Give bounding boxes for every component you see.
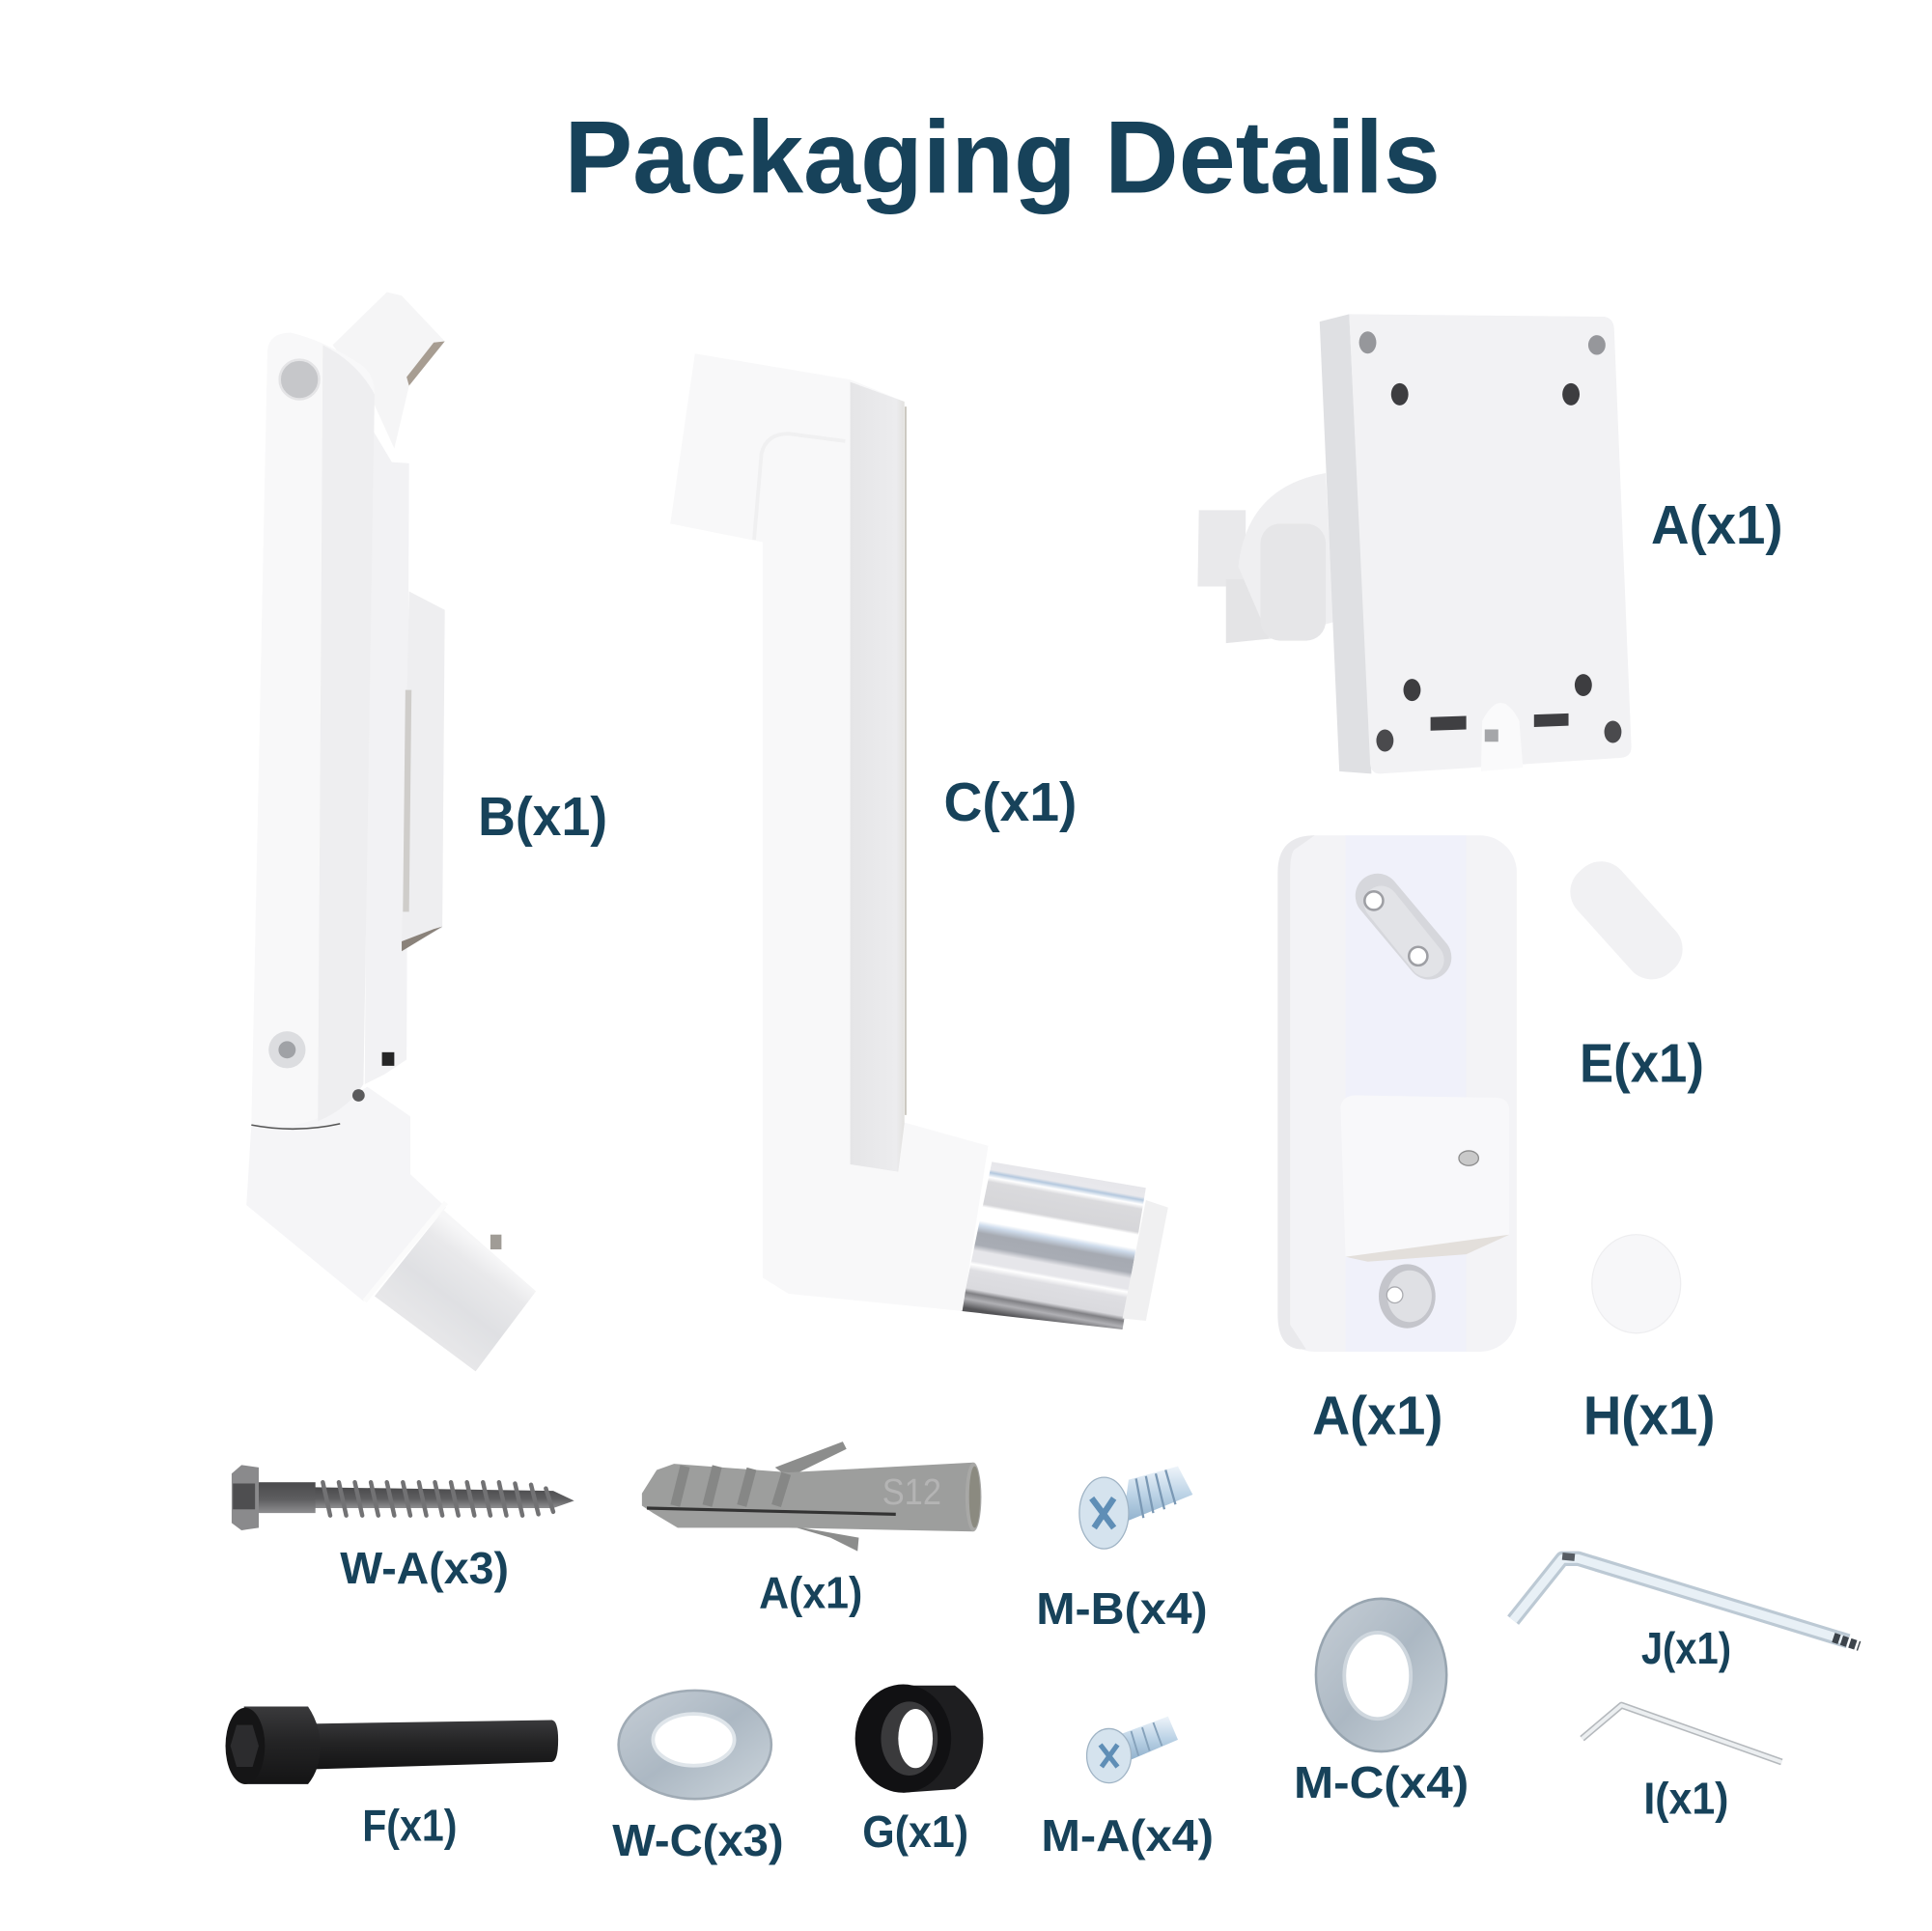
- mounting holes: [1359, 331, 1621, 751]
- thread: [1119, 1717, 1178, 1761]
- part M-B: machine screw: [1079, 1467, 1192, 1549]
- part H: round cap: [1592, 1235, 1681, 1333]
- main body of arm B: [251, 333, 375, 1126]
- cap inner fold: [754, 434, 845, 540]
- clamp screw: [1459, 1151, 1478, 1165]
- sleeve end: [1123, 1200, 1168, 1321]
- shaft: [311, 1721, 558, 1770]
- part C: L-shaped arm: [670, 353, 1168, 1329]
- thread teeth: [322, 1482, 553, 1516]
- back plate of arm B: [402, 592, 445, 951]
- label A, plate: A(x1): [1651, 494, 1783, 555]
- title: Packaging Details: [564, 99, 1441, 215]
- part W-A: lag bolt: [232, 1465, 574, 1530]
- seam under arm B: [251, 1124, 340, 1129]
- clamp block: [1340, 1096, 1509, 1262]
- label W-A: W-A(x3): [340, 1543, 509, 1593]
- plate base: [1277, 835, 1517, 1352]
- label M-A: M-A(x4): [1041, 1810, 1214, 1861]
- slots: [1431, 714, 1569, 731]
- label F: F(x1): [362, 1801, 457, 1851]
- arm body: [670, 353, 988, 1311]
- part E: slot cover: [1559, 851, 1694, 991]
- socket: [226, 1708, 265, 1784]
- head: [244, 1706, 321, 1784]
- left edge: [1277, 835, 1315, 1350]
- pin on arm B: [490, 1235, 501, 1249]
- part: wall anchor: [642, 1441, 981, 1552]
- anchor body: [642, 1463, 973, 1531]
- inner bar of arm B: [365, 425, 409, 1084]
- diagonal slot: [1364, 891, 1429, 966]
- part W-C: washer: [619, 1691, 771, 1799]
- thread lines: [1136, 1469, 1175, 1518]
- lower elbow of arm B: [246, 1087, 446, 1301]
- black clip of arm B: [382, 1052, 394, 1066]
- tube end of arm B: [375, 1210, 536, 1371]
- label J: J(x1): [1641, 1623, 1731, 1673]
- label E: E(x1): [1580, 1032, 1704, 1093]
- chrome sleeve: [961, 1161, 1146, 1329]
- lower hole: [1379, 1264, 1436, 1329]
- part A: VESA plate with bracket: [1197, 314, 1632, 773]
- hex head: [232, 1465, 259, 1530]
- center notch: [1481, 703, 1523, 771]
- arm edge line: [905, 406, 907, 1115]
- top rivet: [280, 360, 320, 399]
- label C: C(x1): [944, 771, 1077, 832]
- bracket tab: [1197, 510, 1246, 586]
- anchor slit: [647, 1508, 896, 1514]
- label A, anchor: A(x1): [759, 1567, 862, 1617]
- lower screw: [268, 1031, 305, 1068]
- plate side: [1320, 314, 1371, 773]
- part F: black bolt: [226, 1706, 558, 1784]
- label G: G(x1): [862, 1806, 968, 1857]
- anchor mouth: [966, 1463, 981, 1531]
- thread: [1123, 1467, 1192, 1523]
- center band: [1346, 835, 1467, 1352]
- head: [1079, 1477, 1129, 1549]
- part B: folding arm: [246, 292, 536, 1371]
- threaded core: [314, 1487, 574, 1508]
- head: [1087, 1728, 1132, 1783]
- label M-B: M-B(x4): [1036, 1583, 1208, 1634]
- bracket cap: [1260, 523, 1326, 641]
- part M-C: washer: [1316, 1599, 1446, 1751]
- label M-C: M-C(x4): [1294, 1757, 1469, 1807]
- part I: small hex key: [1582, 1705, 1781, 1762]
- part A: wall plate: [1277, 835, 1517, 1352]
- label I: I(x1): [1643, 1774, 1728, 1824]
- label W-C: W-C(x3): [612, 1815, 784, 1865]
- shank: [256, 1482, 316, 1513]
- anchor wings: [775, 1441, 858, 1552]
- part M-A: machine screw: [1087, 1717, 1178, 1783]
- part J: hex key screwdriver: [1513, 1556, 1860, 1646]
- thread lines: [1132, 1722, 1162, 1756]
- plate face: [1349, 314, 1632, 773]
- bracket foot: [1226, 579, 1275, 643]
- label B: B(x1): [478, 786, 607, 847]
- label A, wall plate: A(x1): [1312, 1385, 1442, 1445]
- bracket arc: [1239, 473, 1333, 638]
- arm shaded face: [851, 382, 905, 1172]
- tube collar: [365, 1203, 446, 1301]
- anchor ribs: [675, 1467, 786, 1505]
- part G: black spacer: [855, 1685, 983, 1793]
- label H: H(x1): [1583, 1385, 1715, 1445]
- anchor marking: S12: [882, 1471, 941, 1513]
- bearing under arm B: [352, 1089, 365, 1102]
- top bracket of arm B: [333, 292, 445, 449]
